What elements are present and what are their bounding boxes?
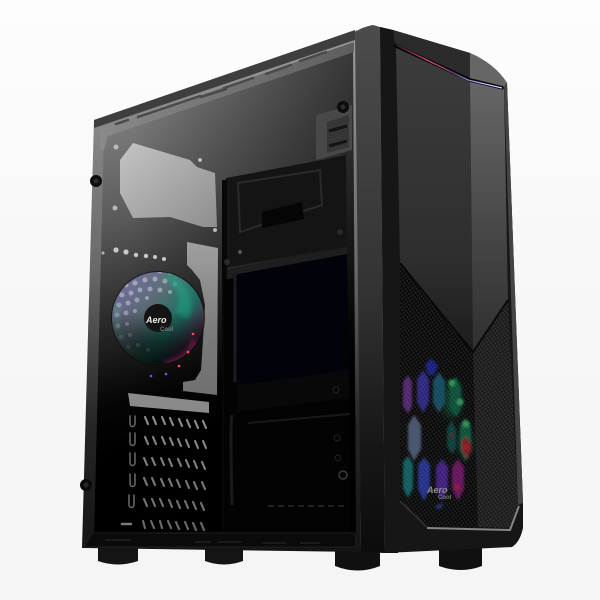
side glass panel — [82, 30, 361, 552]
psu opening — [120, 143, 217, 227]
fan: rear RGB — [110, 247, 206, 377]
fan hub logo: Aero — [145, 315, 167, 325]
RGB fan behind mesh — [403, 358, 473, 509]
front fan logo — [426, 485, 452, 501]
top edge — [94, 30, 355, 128]
rear ventilation slots — [143, 417, 206, 530]
psu shelf bar — [128, 393, 209, 413]
mesh lower trim — [427, 506, 519, 530]
small holes — [102, 144, 217, 254]
feet — [98, 548, 482, 570]
rear bracket cut-outs — [122, 416, 135, 524]
fan backplate cut-out — [183, 242, 218, 395]
drive bracket — [316, 105, 352, 160]
LED strip — [394, 45, 503, 88]
mesh intake — [400, 263, 518, 528]
interior bays — [224, 155, 347, 268]
front fan logo: Aero — [426, 485, 448, 495]
top rail with slots — [100, 42, 354, 150]
glass screws — [80, 101, 349, 491]
front bezel — [380, 27, 523, 553]
front fan logo: Cool — [438, 495, 452, 501]
top chamfer — [393, 30, 470, 80]
front pillar — [355, 25, 398, 553]
upper panel right — [470, 82, 508, 352]
bottom rail — [84, 533, 356, 547]
upper panel left — [396, 47, 473, 352]
product image: PC case — [80, 25, 523, 570]
mesh texture — [400, 263, 518, 528]
fan hub logo: Cool — [160, 327, 174, 333]
fan hub logo — [144, 304, 174, 333]
